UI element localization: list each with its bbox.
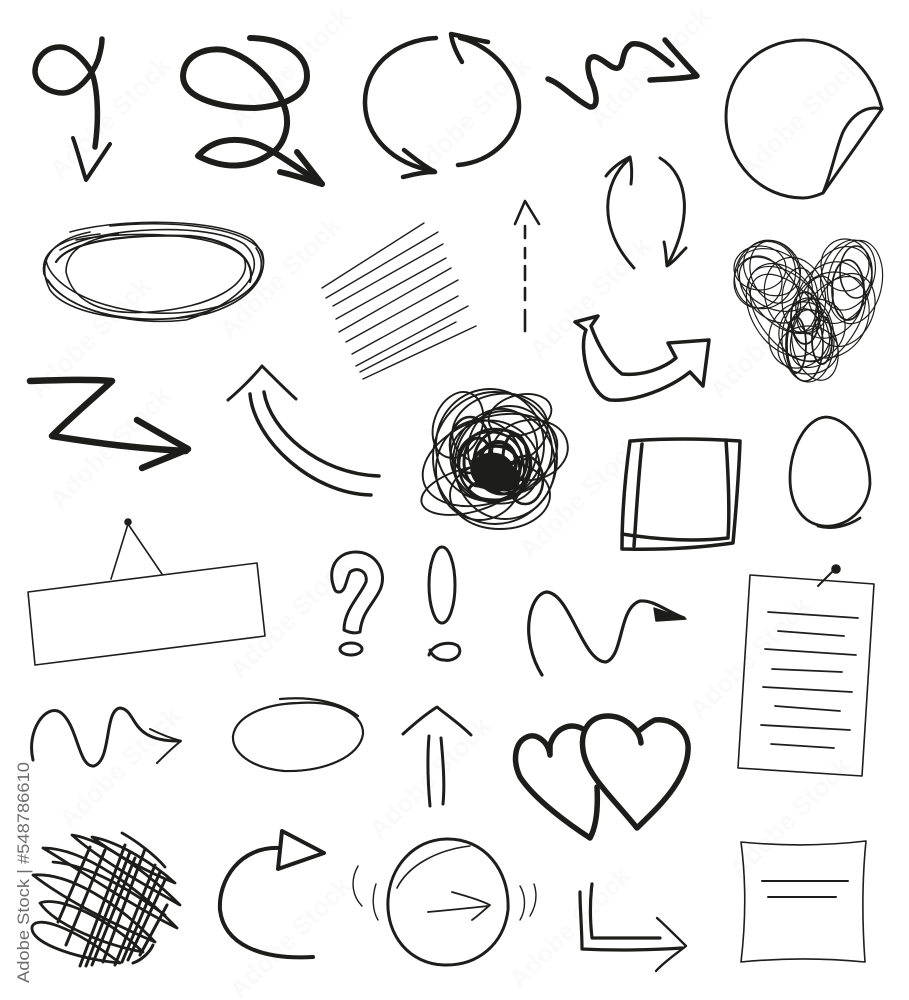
icon: bold zigzag arrow bbox=[30, 380, 188, 468]
icon: circular arrows bbox=[365, 34, 519, 177]
faint stock watermark: Adobe Stock bbox=[403, 50, 537, 184]
icon: double line arrow up bbox=[403, 707, 471, 806]
icon: scribbled oval bbox=[43, 222, 264, 321]
icon: wobbling circle with arrow bbox=[353, 839, 536, 965]
faint stock watermark: Adobe Stock bbox=[43, 380, 177, 514]
icon: diagonal hatching bbox=[322, 223, 476, 379]
icon: loop arrow down bbox=[35, 39, 110, 180]
faint stock watermark: Adobe Stock bbox=[723, 750, 857, 884]
faint stock watermark: Adobe Stock bbox=[23, 270, 157, 404]
icon: dashed arrow up bbox=[515, 201, 539, 331]
icon: wavy arrow with small head bbox=[529, 592, 686, 675]
icon: L-shaped double arrow bbox=[580, 884, 686, 971]
icon: thin wavy arrow bbox=[32, 708, 181, 766]
icon: dense scribble ball bbox=[410, 385, 573, 529]
faint stock watermark: Adobe Stock bbox=[43, 50, 177, 184]
icon: peeling round sticker bbox=[726, 40, 882, 198]
faint stock watermark: Adobe Stock bbox=[223, 550, 357, 684]
icon: exclamation mark bbox=[429, 547, 460, 660]
icon: zigzag arrow right bbox=[548, 40, 697, 107]
faint stock watermark: Adobe Stock bbox=[213, 210, 347, 344]
icon: scribbled hatch ball bbox=[32, 833, 180, 966]
icon: sketched square bbox=[622, 439, 740, 549]
faint stock watermark: Adobe Stock bbox=[583, 0, 717, 134]
icon: double line curved arrow up bbox=[228, 366, 379, 495]
icon: egg outline bbox=[790, 417, 870, 528]
icon: scribbled heart bbox=[725, 229, 889, 385]
icon: hanging sign bbox=[28, 519, 265, 665]
faint stock watermark: Adobe Stock bbox=[503, 860, 637, 994]
icon: question mark bbox=[332, 552, 383, 655]
faint stock watermark: Adobe Stock bbox=[703, 270, 837, 404]
icon: circular arrow with triangle head bbox=[220, 831, 324, 957]
faint stock watermark: Adobe Stock bbox=[223, 0, 357, 134]
faint stock watermark: Adobe Stock bbox=[733, 50, 867, 184]
icon: double curved arrows bbox=[606, 157, 686, 268]
icon: pinned note with lines bbox=[738, 565, 874, 776]
faint stock watermark: Adobe Stock bbox=[523, 230, 657, 364]
icon: oval with swoosh bbox=[233, 698, 363, 771]
stock image credit: Adobe Stock | #548786610 bbox=[14, 762, 33, 983]
faint stock watermark: Adobe Stock bbox=[513, 430, 647, 564]
faint stock watermark: Adobe Stock bbox=[53, 700, 187, 834]
icon: tangled squiggle arrow bbox=[183, 38, 322, 184]
icon: twin hearts bbox=[516, 716, 688, 838]
icon: outlined curved arrow bbox=[575, 316, 709, 400]
faint stock watermark: Adobe Stock bbox=[683, 590, 817, 724]
faint stock watermark: Adobe Stock bbox=[363, 710, 497, 844]
icon: blank note with two lines bbox=[741, 841, 866, 962]
